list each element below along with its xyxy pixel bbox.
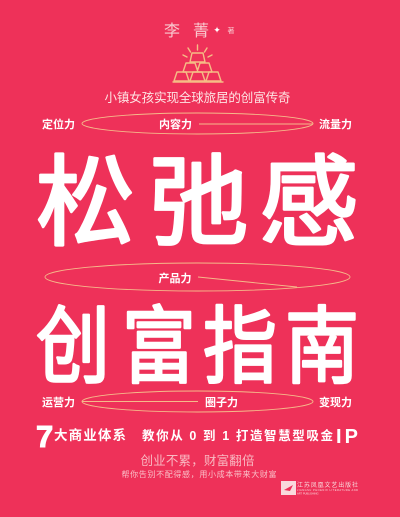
middle ellipse — [45, 263, 350, 291]
sub slogan: 帮你告别不配得感，用小成本带来大财富 — [122, 469, 276, 479]
label row 1: 流量力 — [319, 117, 352, 131]
publisher logo: ART PUBLISHING — [297, 492, 319, 496]
main title: 松弛感: 弛 — [149, 122, 248, 266]
label row 3: 圈子力 — [205, 395, 238, 409]
main title: 创富指南: 富 — [122, 278, 196, 400]
label row 3: 变现力 — [319, 395, 352, 409]
slogan: 创业不累，财富翻倍 — [140, 453, 254, 468]
subtitle: 小镇女孩实现全球旅居的创富传奇 — [104, 90, 290, 105]
icon: gold bars — [173, 45, 223, 82]
tagline: 7 — [36, 419, 53, 454]
publisher logo — [281, 481, 358, 496]
publisher logo: 江苏凤凰文艺出版社 — [297, 481, 358, 489]
top ellipse — [82, 113, 313, 134]
label row 3 — [42, 395, 352, 409]
main title: 松弛感: 感 — [260, 122, 358, 266]
bottom ellipse — [82, 391, 313, 412]
author: 著 — [228, 26, 234, 35]
label: 产品力: 产品力 — [158, 271, 192, 285]
main title: 创富指南: 南 — [285, 278, 359, 400]
author: ✦ — [213, 25, 221, 35]
label row 3: 运营力 — [42, 395, 75, 409]
main title: 创富指南: 创 — [36, 278, 110, 400]
author: 李 — [164, 22, 180, 40]
author — [164, 22, 234, 40]
tagline: 教你从 0 到 1 打造智慧型吸金 — [142, 428, 333, 443]
tagline — [36, 419, 358, 454]
label row 1 — [42, 117, 352, 131]
main title: 松弛感 — [36, 122, 358, 266]
label row 1: 定位力 — [42, 117, 75, 131]
main title: 创富指南 — [36, 278, 359, 400]
main title: 松弛感: 松 — [36, 122, 135, 266]
label row 1: 内容力 — [159, 117, 192, 131]
tagline: IP — [336, 426, 358, 448]
publisher logo: JIANGSU PHOENIX LITERATURE AND — [297, 488, 358, 492]
tagline: 大商业体系 — [54, 427, 126, 443]
author: 菁 — [193, 22, 209, 40]
main title: 创富指南: 指 — [203, 278, 277, 400]
